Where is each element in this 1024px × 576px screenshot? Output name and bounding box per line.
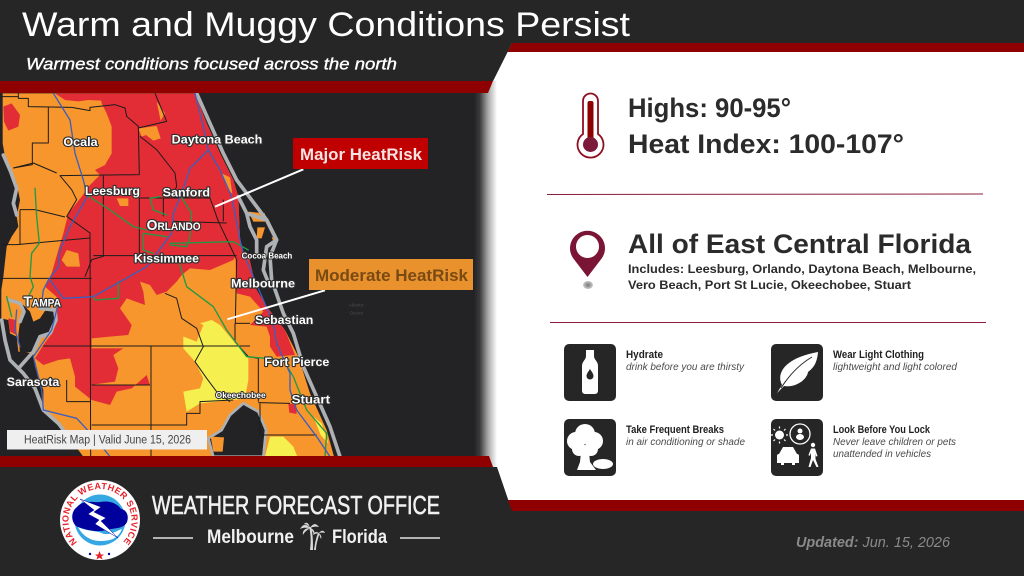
- office location: [153, 527, 440, 548]
- tip: light clothing: Wear Light Clothing: [833, 349, 924, 361]
- tip: light clothing: [833, 349, 958, 373]
- city labels: [7, 132, 330, 407]
- map caption: HeatRisk Map | Valid June 15, 2026: [24, 434, 191, 446]
- temperature text: [628, 93, 904, 159]
- location heading and list: Includes: Leesburg, Orlando, Daytona Beach, Melbourne,: [628, 262, 976, 276]
- map caption: [7, 430, 207, 450]
- land: orange moderate risk area: [1, 93, 334, 457]
- coastline and barrier islands: [2, 93, 340, 457]
- city labels: Ocala: [63, 135, 98, 149]
- office location: Florida: [332, 527, 387, 548]
- city labels: Kissimmee: [134, 252, 199, 266]
- tip: look before you lock: Never leave children or pets: [833, 436, 957, 448]
- county boundaries: [1, 93, 317, 457]
- city labels: Sarasota: [7, 375, 59, 389]
- city labels: Daytona Beach: [172, 132, 262, 146]
- icon: shade tree: [564, 419, 616, 476]
- location heading and list: All of East Central Florida: [628, 229, 972, 259]
- Lake Okeechobee: [208, 403, 266, 457]
- yellow: minor risk area: [183, 320, 328, 457]
- icon: location pin: [570, 231, 605, 289]
- icon: look before you lock: [771, 419, 823, 476]
- callout: Moderate HeatRisk: Moderate HeatRisk: [315, 267, 469, 285]
- panel: white information panel: [493, 43, 1024, 505]
- city labels: Stuart: [292, 393, 330, 407]
- city labels: Sebastian: [255, 313, 313, 327]
- logo: National Weather Service: NATIONAL WEATHER SERVICE: [62, 482, 138, 546]
- tip: hydrate: [626, 349, 745, 373]
- temperature text: Highs: 90-95°: [628, 93, 791, 123]
- tip: frequent breaks: Take Frequent Breaks: [626, 424, 724, 436]
- city labels: TAMPA: [23, 295, 61, 311]
- callout line: moderate: [227, 290, 325, 319]
- tip: hydrate: drink before you are thirsty: [626, 361, 745, 373]
- tip: frequent breaks: [626, 424, 745, 448]
- callout: Major HeatRisk: [293, 138, 428, 169]
- tip: look before you lock: unattended in vehicles: [833, 448, 932, 460]
- callout line: major: [215, 169, 303, 207]
- city labels: Fort Pierce: [264, 355, 329, 369]
- location heading and list: Vero Beach, Port St Lucie, Okeechobee, Stuart: [628, 278, 911, 292]
- city labels: Cocoa Beach: [242, 251, 292, 261]
- location heading and list: [628, 229, 976, 292]
- icon: water bottle: [564, 344, 616, 401]
- office name: WEATHER FORECAST OFFICE: [152, 490, 440, 520]
- footer band: [0, 456, 1024, 576]
- Tampa Bay and Gulf shoreline: [10, 298, 57, 353]
- header band: [0, 0, 1024, 93]
- tip: look before you lock: Look Before You Lock: [833, 424, 931, 436]
- map: HeatRisk across east central Florida: [0, 93, 364, 456]
- tip: look before you lock: [833, 424, 957, 460]
- red: major risk area: [3, 93, 297, 414]
- icon: palm trees: [300, 523, 325, 550]
- city labels: Sanford: [163, 186, 210, 200]
- orange patches inside red area: [62, 102, 276, 267]
- city labels: ORLANDO: [147, 218, 201, 234]
- Atlantic Ocean label: [348, 303, 364, 314]
- callout: Major HeatRisk: Major HeatRisk: [300, 146, 423, 164]
- Atlantic Ocean label: Ocean: [349, 310, 364, 315]
- city labels: Melbourne: [231, 276, 295, 290]
- temperature text: Heat Index: 100-107°: [628, 129, 904, 159]
- icon: feather: [771, 344, 823, 401]
- tip: light clothing: lightweight and light colored: [833, 361, 958, 373]
- callout: Moderate HeatRisk: [309, 259, 473, 290]
- fade from map into white panel: [474, 81, 497, 467]
- tip: hydrate: Hydrate: [626, 349, 663, 361]
- city labels: Okeechobee: [216, 390, 266, 400]
- updated date: Updated: Jun. 15, 2026: [796, 535, 951, 551]
- Atlantic Ocean label: Atlantic: [349, 303, 365, 308]
- city labels: Leesburg: [85, 184, 140, 198]
- tip: frequent breaks: in air conditioning or shade: [626, 436, 745, 448]
- office location: Melbourne: [207, 527, 294, 548]
- title: Warm and Muggy Conditions Persist: [22, 6, 631, 44]
- highways: [7, 93, 330, 457]
- icon: thermometer: [578, 94, 604, 158]
- subtitle: Warmest conditions focused across the north: [26, 56, 397, 74]
